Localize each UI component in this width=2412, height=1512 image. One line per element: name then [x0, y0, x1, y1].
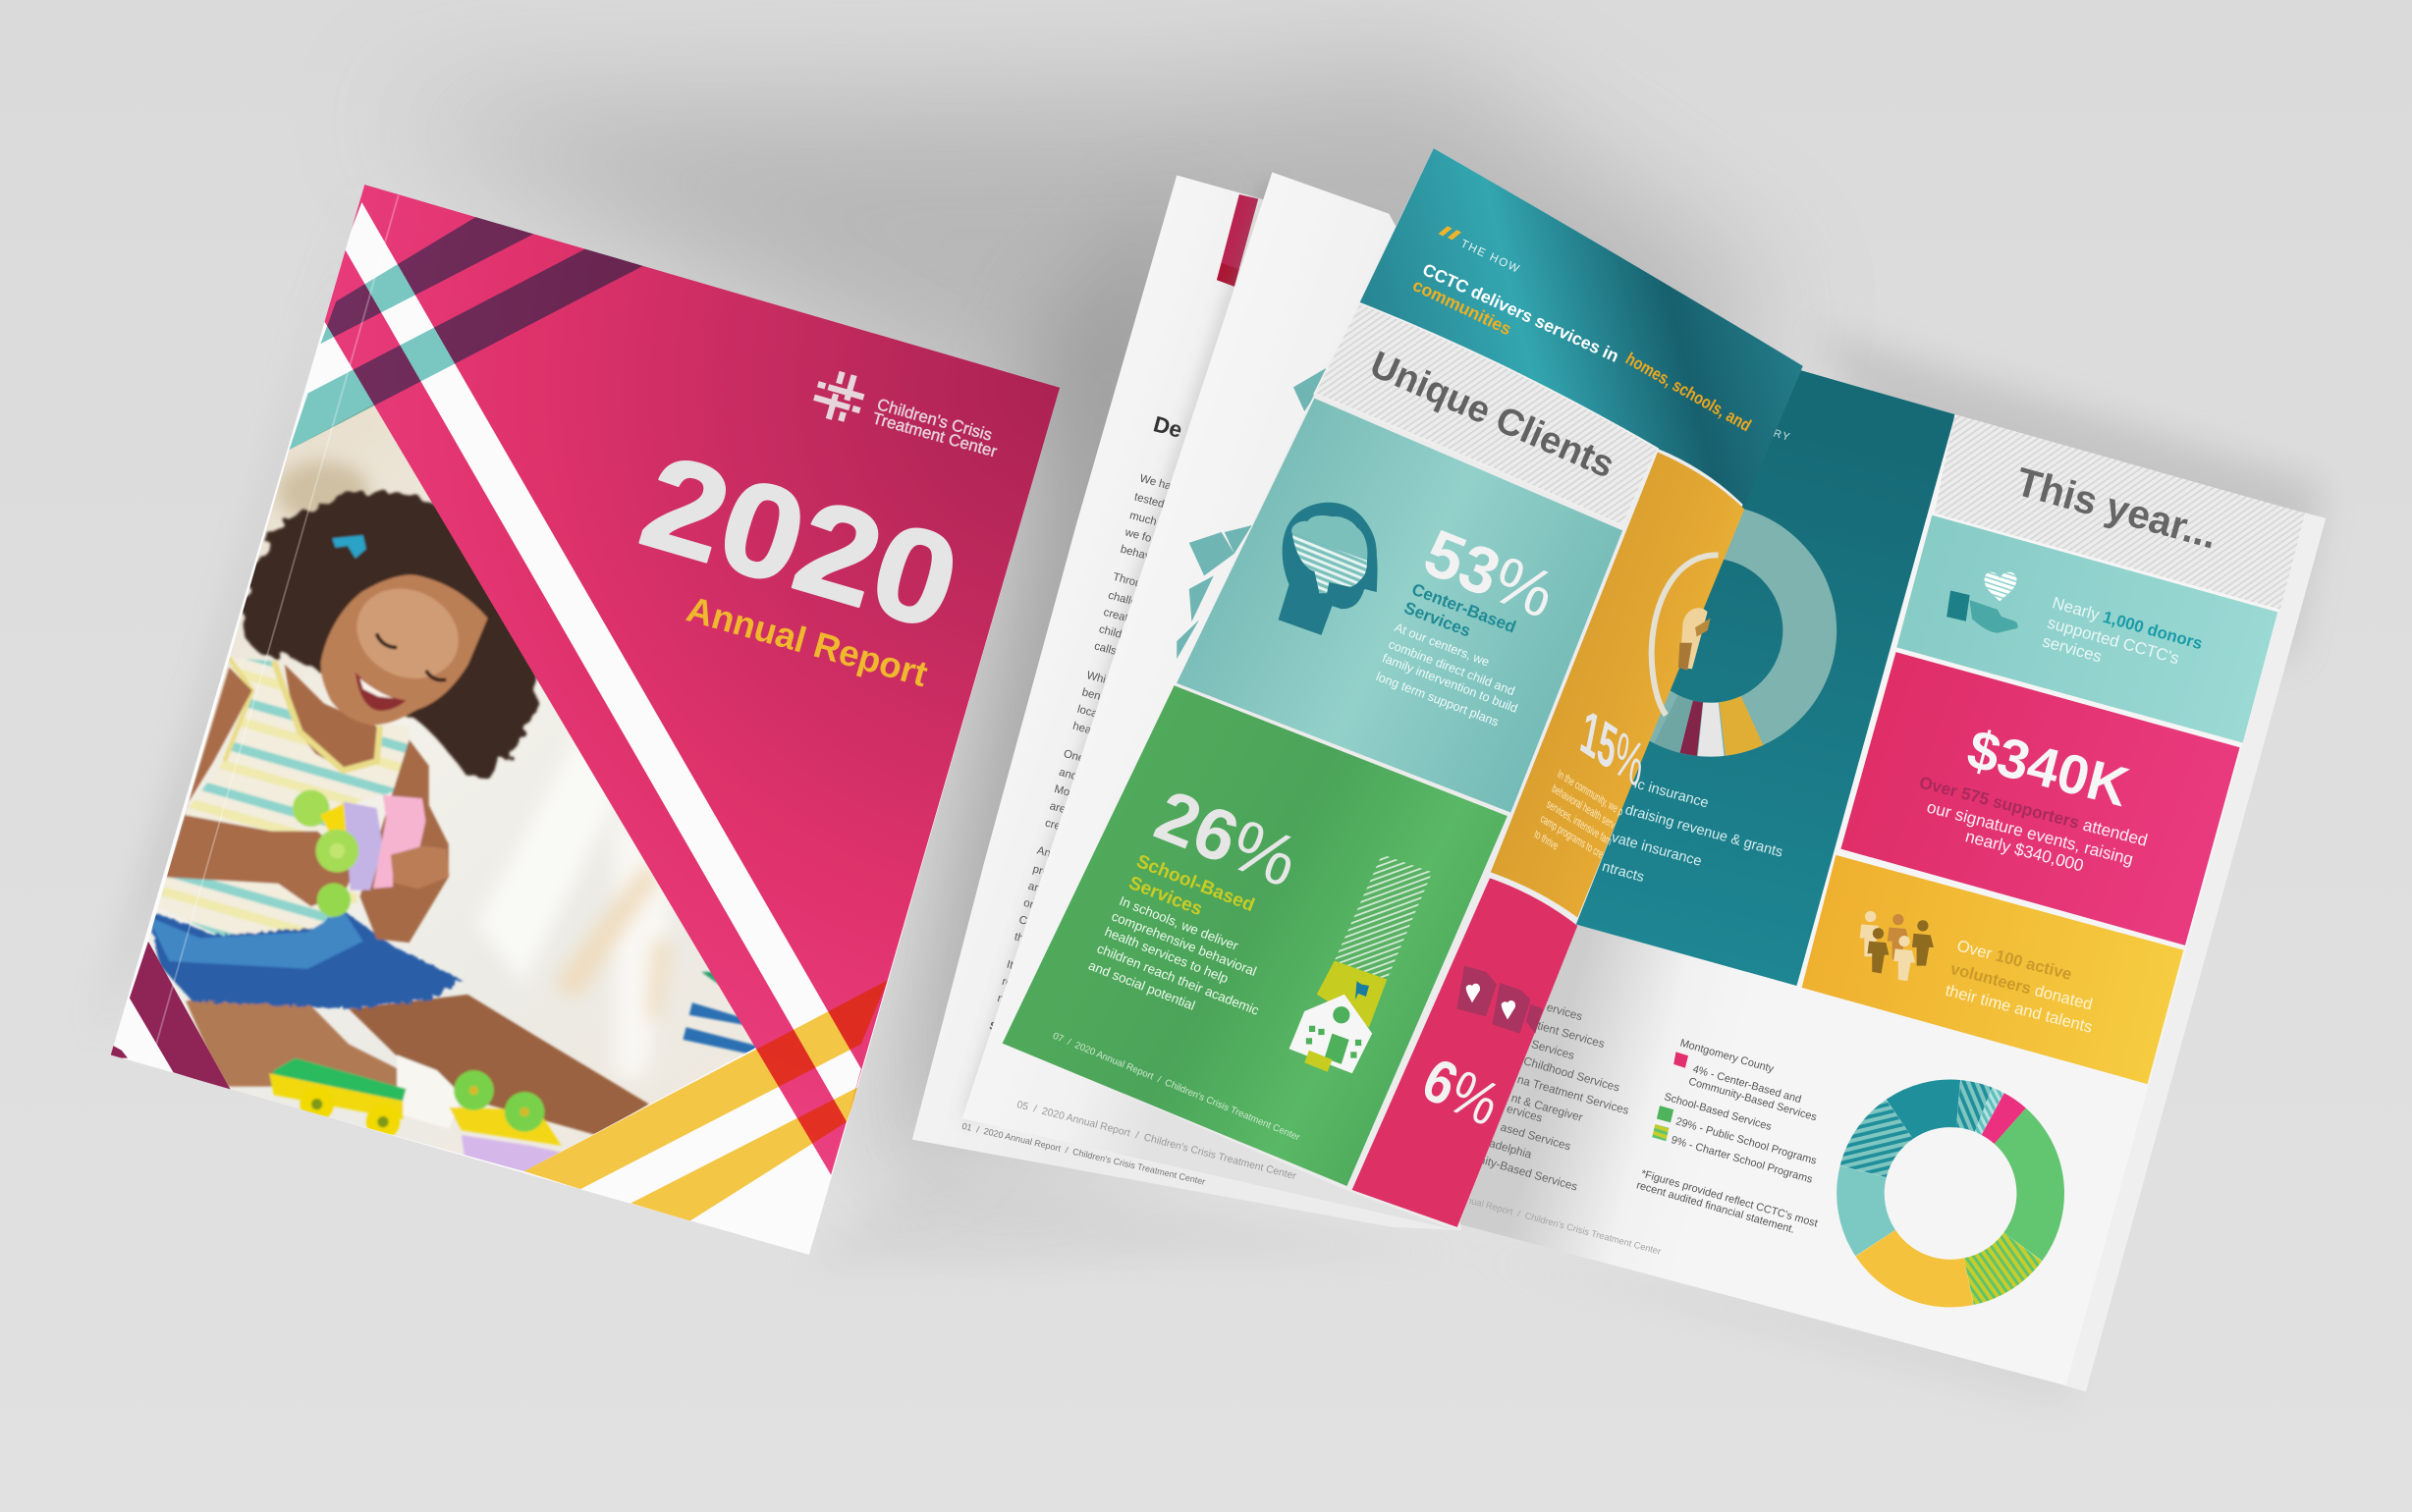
legend swatch green	[1657, 1106, 1673, 1122]
cover logo wordmark: Treatment Center	[870, 408, 1000, 461]
fundraising text: nearly $340,000	[1963, 826, 2086, 876]
letter body fragments: much	[1128, 510, 1158, 528]
headline: CCTC delivers services in	[1420, 259, 1622, 366]
letter body fragments: child	[1098, 623, 1123, 641]
fundraising text: Over 575 supporters attended	[1917, 772, 2150, 850]
program description: comprehensive behavioral	[1110, 908, 1259, 979]
donors text: supported CCTC's	[2046, 614, 2181, 668]
teal overlay bands	[289, 216, 643, 450]
percentage: 6%	[1412, 1045, 1510, 1139]
letter body fragments: It	[1006, 959, 1015, 972]
services list fragments: na Treatment Services	[1516, 1073, 1630, 1117]
letter heading: De	[1151, 410, 1185, 443]
fundraising text: our signature events, raising	[1925, 797, 2135, 869]
face	[321, 575, 488, 725]
toy blocks in hands	[293, 789, 330, 827]
program description: At our centers, we	[1393, 621, 1491, 670]
legend: Community-Based Services	[1687, 1076, 1819, 1124]
volunteers text	[1944, 936, 2095, 1037]
letter body fragments: an	[1027, 881, 1042, 895]
revenue list: draising revenue & grants	[1623, 802, 1784, 861]
letter body fragments: Whil	[1085, 670, 1110, 686]
program description: and social potential	[1086, 958, 1197, 1013]
icon: volunteers	[1860, 911, 1934, 981]
program description	[1086, 893, 1261, 1018]
headline	[1409, 259, 1754, 436]
card: philadelphia services	[1352, 878, 1577, 1227]
page 1 footer: 01 / 2020 Annual Report / Children's Crisis Treatment Center	[961, 1121, 1206, 1187]
program title: Center-Based	[1409, 579, 1519, 636]
hair	[243, 491, 538, 778]
card: center-based services	[1177, 399, 1622, 812]
services list fragments: nity-Based Services	[1477, 1154, 1579, 1194]
eyes	[376, 633, 446, 680]
back page 1: letter	[912, 176, 1461, 1230]
turning page: the how	[1003, 148, 1803, 1230]
icon: hand holding heart	[1946, 572, 2018, 633]
volunteers text: volunteers donated	[1948, 959, 2095, 1014]
letter body fragments: calls	[1093, 640, 1118, 658]
heading: this year: This year...	[2011, 459, 2222, 558]
legend: 29% - Public School Programs	[1674, 1115, 1818, 1167]
legend: *Figures provided reflect CCTC's most	[1640, 1168, 1819, 1230]
revenue list	[1600, 776, 1784, 886]
program donut chart	[1824, 1066, 2077, 1321]
legend swatch pink	[1673, 1052, 1688, 1068]
services list fragments: ervices	[1545, 1000, 1584, 1023]
services list fragments: Childhood Services	[1522, 1054, 1621, 1095]
letter body fragments: are	[1048, 800, 1068, 816]
amount: $340K	[1961, 718, 2135, 818]
legend swatch lime	[1652, 1124, 1669, 1141]
services list fragments: ladelphia	[1485, 1136, 1533, 1161]
right page footer: nual Report / Children's Crisis Treatment Center	[1465, 1194, 1663, 1257]
legend: School-Based Services	[1663, 1091, 1774, 1133]
program description: behavioral health serv	[1550, 783, 1617, 833]
letter body fragments: tested	[1133, 491, 1166, 511]
cover of the annual report	[108, 185, 1060, 1255]
services list fragments	[1477, 1000, 1630, 1194]
teal header	[1359, 148, 1803, 506]
smile	[356, 672, 407, 711]
card: fundraising	[1840, 652, 2240, 945]
footer: 07 / 2020 Annual Report / Children's Crisis Treatment Center	[1051, 1031, 1302, 1144]
hair clip	[332, 535, 366, 559]
services list fragments: ased Services	[1499, 1121, 1572, 1153]
blue skirt	[147, 910, 462, 1009]
letter body fragments: An	[1035, 845, 1052, 860]
soft shadow from page 2 onto page 1	[972, 182, 1272, 1118]
cover subtitle: Annual Report	[683, 588, 932, 694]
program description	[1532, 768, 1624, 862]
neck and chest	[285, 665, 378, 772]
percentage: 53%	[1414, 515, 1564, 632]
back page 2	[962, 172, 1538, 1230]
program description	[1374, 621, 1519, 729]
letter body fragments: or	[1022, 897, 1035, 911]
program title: Services	[1401, 597, 1473, 641]
icon: school building with progress bar	[1289, 854, 1432, 1073]
letter body fragments: We ha	[1138, 473, 1174, 493]
icons: keystones with hearts	[1456, 966, 1543, 1034]
program description: health services to help	[1103, 924, 1231, 986]
white diagonal stripe	[345, 202, 861, 1122]
toy car	[449, 1107, 562, 1146]
letter body fragments: pre	[1031, 863, 1050, 879]
hatched header: this year	[1935, 414, 2305, 610]
revenue list: vate insurance	[1610, 830, 1703, 870]
letter body fragments: behav	[1120, 544, 1152, 563]
cover logo wordmark: Children's Crisis	[875, 395, 994, 445]
letter body fragments: re	[1001, 976, 1014, 990]
sock	[397, 1054, 462, 1129]
revenue list: ntracts	[1600, 859, 1646, 886]
program description: combine direct child and	[1387, 637, 1516, 698]
letter body fragments: we fo	[1123, 526, 1153, 545]
donors text: services	[2040, 631, 2104, 666]
hatched header: unique clients	[1314, 303, 1658, 526]
icon: head with brain	[1279, 503, 1378, 635]
right page of open brochure	[1453, 356, 2326, 1392]
letter body fragments: S	[988, 1020, 999, 1034]
legend: recent audited financial statement.	[1635, 1179, 1796, 1236]
volunteers text: their time and talents	[1944, 981, 2095, 1037]
section label: THE HOW	[1458, 238, 1522, 276]
card: donors	[1896, 515, 2277, 743]
section label	[1439, 226, 1522, 276]
letter body fragments: n	[996, 993, 1005, 1005]
percentage: 15%	[1576, 695, 1649, 801]
legend: 9% - Charter School Programs	[1670, 1134, 1814, 1186]
revenue list: ic insurance	[1632, 776, 1710, 812]
program title: School-Based	[1133, 851, 1257, 916]
services list fragments: tient Services	[1536, 1019, 1606, 1051]
program description: family intervention to build	[1380, 651, 1519, 716]
photo: child playing with toy blocks	[148, 405, 756, 1171]
card: community-based services	[1491, 452, 1744, 917]
letter body fragments: Mo	[1053, 783, 1071, 799]
letter body fragments: and	[1058, 767, 1078, 783]
letter body fragments: Co	[1017, 914, 1034, 929]
donors text: Nearly 1,000 donors	[2051, 593, 2205, 653]
program title: Services	[1125, 873, 1205, 920]
services list fragments: ervices	[1506, 1103, 1544, 1125]
teal column	[1554, 356, 1955, 986]
letter body fragments: One	[1063, 748, 1086, 765]
letter body fragments	[988, 473, 1174, 1034]
card: volunteers	[1802, 855, 2183, 1084]
lower-left maroon band	[130, 942, 231, 1090]
program description: camp programs to cre	[1539, 813, 1605, 862]
map fragments	[1177, 367, 1327, 659]
percentage: 26%	[1145, 774, 1309, 902]
cover year: 2020	[628, 426, 974, 658]
program description: to thrive	[1532, 828, 1560, 854]
legend: 4% - Center-Based and	[1691, 1063, 1802, 1106]
headline: homes, schools, and	[1622, 350, 1754, 436]
letter body fragments: hea	[1071, 721, 1093, 736]
legend	[1635, 1037, 1819, 1236]
program description: services, intensive fam	[1545, 798, 1614, 849]
yellow overlay bands	[524, 981, 888, 1220]
letter body fragments: Throu	[1112, 571, 1143, 590]
letter body fragments: loca	[1076, 704, 1100, 721]
program description: In schools, we deliver	[1118, 893, 1240, 953]
shirt collar	[274, 662, 380, 771]
services list fragments: Services	[1530, 1038, 1576, 1062]
letter body fragments: bene	[1080, 686, 1108, 704]
card: school-based services	[1003, 685, 1508, 1186]
program description: In the community, we p	[1556, 768, 1624, 820]
cover white base	[114, 301, 1060, 1255]
program description: long term support plans	[1374, 670, 1501, 729]
letter body fragments: th	[1013, 931, 1025, 945]
legend: Montgomery County	[1678, 1037, 1776, 1075]
cover logo	[809, 366, 869, 427]
heading: unique clients: Unique Clients	[1364, 344, 1620, 486]
icon: circled figure	[1652, 555, 1719, 715]
section label: ARY	[1764, 425, 1792, 444]
page stack edge	[2064, 513, 2326, 1392]
program description: children reach their academic	[1095, 941, 1261, 1018]
page 2 footer: 05 / 2020 Annual Report / Children's Crisis Treatment Center	[1015, 1100, 1297, 1182]
right page paper	[1453, 370, 2306, 1385]
headline: communities	[1409, 275, 1514, 339]
pink field	[324, 185, 1060, 1175]
legs	[185, 999, 399, 1088]
funding donut chart	[1579, 500, 1841, 762]
page base	[1003, 148, 1803, 1230]
letter body fragments: challe	[1107, 590, 1138, 609]
spine crease	[148, 195, 399, 1072]
striped tank top	[157, 658, 410, 936]
toy truck	[271, 1058, 407, 1110]
red tab	[1217, 194, 1258, 287]
volunteers text: Over 100 active	[1955, 936, 2074, 984]
letter body fragments: creat	[1102, 607, 1130, 624]
letter body fragments: cre	[1044, 817, 1062, 833]
arms and hands	[164, 668, 356, 906]
services list fragments: nt & Caregiver	[1509, 1092, 1584, 1124]
